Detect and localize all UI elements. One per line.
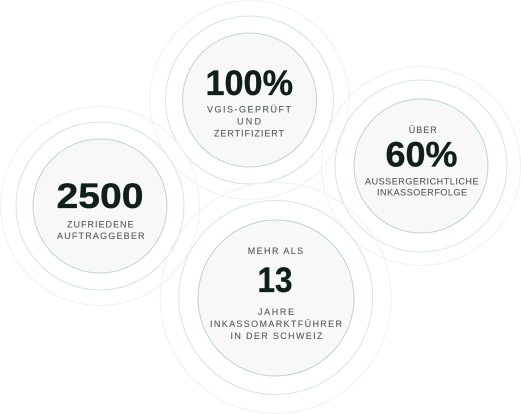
figure: 100%: 100% — [206, 63, 293, 103]
figure: 13: 13 — [258, 260, 292, 300]
label: Jahre Inkassomarktführer in der Schweiz — [210, 307, 342, 341]
label: Jahre Inkassomarktführer in der Schweiz: INKASSOMARKTFÜHRER — [210, 319, 342, 329]
panel: 13 years — [160, 182, 391, 414]
label: aussergerichtliche Inkassoerfolge: INKASSOERFOLGE — [377, 188, 467, 198]
label: VGIS-geprüft und zertifiziert: UND — [237, 117, 262, 127]
figure: 60%: 60% — [386, 135, 458, 175]
label: VGIS-geprüft und zertifiziert — [207, 105, 292, 139]
panel: over 60% — [322, 66, 520, 266]
label: aussergerichtliche Inkassoerfolge — [365, 176, 478, 198]
label: zufriedene Auftraggeber: AUFTRAGGEBER — [57, 231, 145, 241]
label: zufriedene Auftraggeber — [57, 219, 145, 241]
label: Jahre Inkassomarktführer in der Schweiz: IN DER SCHWEIZ — [230, 331, 323, 341]
label: aussergerichtliche Inkassoerfolge: AUSSERGERICHTLICHE — [365, 176, 478, 186]
label: VGIS-geprüft und zertifiziert: VGIS-GEPRÜFT — [207, 105, 292, 115]
panel: 100% certified — [150, 0, 349, 200]
label: VGIS-geprüft und zertifiziert: ZERTIFIZIERT — [214, 129, 284, 139]
panel: 2500 clients — [0, 106, 200, 306]
label: Jahre Inkassomarktführer in der Schweiz: JAHRE — [258, 307, 294, 317]
label: über: ÜBER — [409, 125, 437, 135]
label: mehr als: MEHR ALS — [248, 246, 303, 256]
label: zufriedene Auftraggeber: ZUFRIEDENE — [67, 219, 134, 229]
figure: 2500: 2500 — [56, 176, 144, 216]
